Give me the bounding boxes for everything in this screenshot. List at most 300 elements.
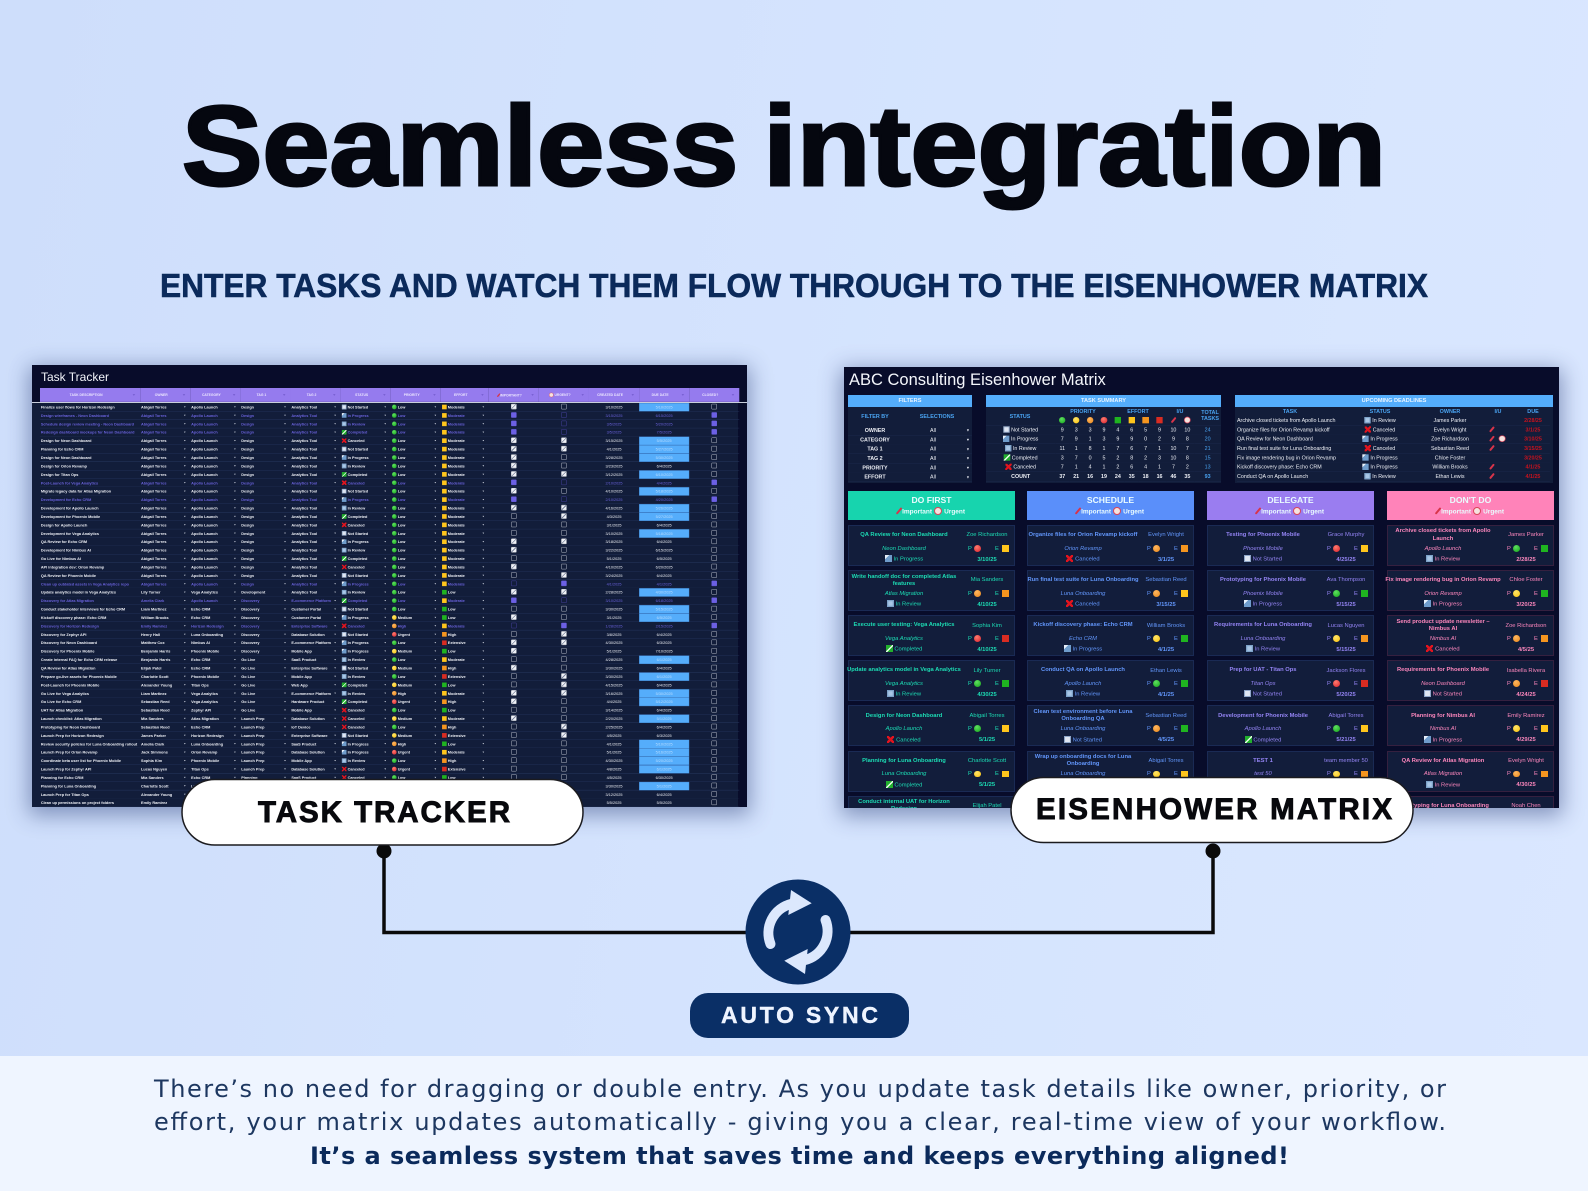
task cards: do first: P: [968, 546, 972, 552]
tracker task rows: Low: [398, 574, 405, 578]
tracker task rows: QA Review for Phoenix Mobile: [41, 574, 96, 578]
task summary block: 1: [1158, 446, 1161, 451]
tracker task rows: Clean up permissions on project folders: [41, 801, 114, 805]
tracker task rows: Low: [448, 616, 455, 620]
tracker task rows: Database Solution: [291, 633, 325, 637]
tracker task rows: 6/30/2025: [656, 776, 673, 780]
task summary block: 93: [1205, 474, 1211, 479]
tracker column headers: CATEGORY: [202, 393, 221, 397]
upcoming deadlines block: In Progress: [1370, 437, 1398, 442]
tracker task rows: Nimbus AI: [191, 641, 210, 645]
tracker task rows: In Progress: [348, 456, 369, 460]
upcoming deadlines block: In Review: [1372, 418, 1396, 424]
task cards: delegate: In Progress: [1253, 602, 1282, 608]
task cards: delegate: 5/21/25: [1336, 737, 1356, 743]
tracker task rows: Discovery: [241, 649, 260, 654]
tracker task rows: Luna Onboarding: [191, 742, 223, 746]
task cards: delegate: E: [1354, 591, 1358, 597]
tracker task rows: 5/5/2025: [657, 801, 672, 805]
task summary block: PRIORITY: [1070, 409, 1096, 415]
tracker task rows: Vega Analytics: [191, 590, 218, 595]
quadrant header: delegate: DELEGATE: [1267, 494, 1314, 504]
tracker task rows: Development: [241, 590, 265, 595]
tracker task rows: Moderate: [448, 489, 465, 494]
task summary block: I/U: [1177, 409, 1183, 415]
label pill: auto sync: AUTO SYNC: [721, 1002, 878, 1028]
tracker task rows: 6/1/2025: [657, 767, 672, 771]
quadrant header: schedule: Important Urgent: [1081, 508, 1144, 515]
task cards: do first: Update analytics model in Vega Analytics: [847, 667, 961, 673]
tracker task rows: Clean up outdated assets in Vega Analytics repo: [41, 582, 129, 586]
tracker task rows: 6/5/2025: [657, 616, 672, 620]
tracker task rows: Apollo Launch: [191, 565, 218, 569]
tracker task rows: Design: [241, 515, 254, 519]
task summary block: Canceled: [1013, 464, 1036, 470]
task cards: delegate: P: [1327, 546, 1331, 552]
filters block: ▼: [966, 447, 970, 451]
tracker task rows: Atlas Migration: [191, 717, 219, 721]
tracker task rows: Apollo Launch: [191, 498, 218, 502]
tracker task rows: SaaS Product: [291, 784, 316, 788]
tracker task rows: Design: [241, 506, 254, 510]
tracker task rows: Discovery: [241, 633, 260, 637]
tracker task rows: Phoenix Mobile: [191, 759, 219, 763]
tracker task rows: Launch Prep for Orion Revamp: [41, 750, 97, 755]
tracker task rows: 6/1/2025: [657, 675, 672, 679]
task cards: delegate: 5/15/25: [1336, 647, 1356, 653]
task cards: don't do: P: [1507, 726, 1511, 732]
tracker task rows: Moderate: [448, 473, 465, 477]
tracker task rows: 4/30/2025: [656, 590, 673, 595]
task summary block: 21: [1205, 446, 1211, 451]
upcoming deadlines block: William Brooks: [1432, 465, 1468, 470]
tracker task rows: Development for Nimbus AI: [41, 548, 91, 553]
tracker task rows: In Progress: [348, 641, 369, 645]
task cards: don't do: Neon Dashboard: [1421, 681, 1465, 687]
tracker task rows: Matthew Cox: [141, 641, 165, 645]
task cards: don't do: E: [1534, 726, 1538, 732]
tracker task rows: 2/15/2025: [656, 624, 673, 628]
tracker task rows: QA Review for Atlas Migration: [41, 666, 95, 670]
task cards: do first: Conduct internal UAT for Horizon: [858, 799, 950, 805]
tracker task rows: Low: [448, 742, 455, 746]
tracker task rows: Development for Phoenix Mobile: [41, 515, 100, 519]
task cards: do first: Charlotte Scott: [968, 758, 1006, 764]
task cards: do first: P: [968, 636, 972, 642]
task cards: do first: In Progress: [894, 557, 923, 563]
tracker task rows: Prototyping for Neon Dashboard: [41, 725, 100, 729]
tracker task rows: 5/10/2025: [656, 742, 673, 746]
tracker task rows: Low: [398, 506, 405, 510]
task summary block: 37: [1059, 474, 1065, 479]
tracker task rows: Low: [398, 658, 405, 662]
tracker task rows: Low: [398, 582, 405, 586]
task cards: delegate: [1207, 525, 1374, 777]
tracker task rows: Phoenix Mobile: [191, 649, 219, 654]
filters block: All: [930, 446, 936, 452]
tracker task rows: Design: [241, 430, 254, 435]
tracker task rows: Development for Vega Analytics: [41, 531, 99, 536]
tracker task rows: Launch Prep: [241, 734, 264, 738]
task cards: do first: Apollo Launch: [886, 726, 922, 732]
tracker task rows: Post-Launch for Phoenix Mobile: [41, 683, 99, 687]
tracker task rows: Go Live for Echo CRM: [41, 700, 81, 704]
tracker task rows: Design for Apollo Launch: [41, 523, 87, 527]
tracker task rows: Low: [398, 708, 405, 713]
tracker task rows: Completed: [348, 599, 367, 603]
filters block: All: [930, 465, 936, 471]
tracker task rows: Go Live: [241, 666, 255, 670]
tracker task rows: Analytics Tool: [291, 590, 317, 595]
tracker task rows: Low: [398, 641, 405, 645]
upcoming deadlines block: STATUS: [1370, 409, 1390, 415]
tracker task rows: Abigail Torres: [141, 515, 166, 519]
task summary block: 1: [1158, 464, 1161, 470]
tracker task rows: Moderate: [448, 691, 465, 696]
tracker task rows: Go Live: [241, 708, 255, 713]
footer description text: effort, your matrix updates automatically - giving you a clear, real-time view of your workflow.: [154, 1108, 1446, 1136]
task summary block: 1: [1075, 464, 1078, 470]
task cards: schedule: Wrap up onboarding docs for Luna: [1035, 754, 1131, 760]
task cards: schedule: 4/1/25: [1158, 647, 1174, 653]
tracker task rows: Analytics Tool: [291, 506, 317, 510]
filters block: All: [930, 474, 936, 480]
tracker task rows: 4/1/2025: [607, 742, 621, 746]
task cards: don't do: P: [1507, 771, 1511, 777]
tracker task rows: Low: [398, 489, 405, 494]
tracker task rows: Analytics Tool: [291, 498, 317, 502]
tracker task rows: In Progress: [348, 540, 369, 544]
task summary block: 11: [1060, 446, 1065, 451]
task cards: schedule: Abigail Torres: [1148, 758, 1184, 764]
tracker task rows: Design for Orion Revamp: [41, 464, 87, 468]
task summary block: 5: [1102, 455, 1105, 461]
task cards: schedule: Luna Onboarding: [1061, 771, 1105, 777]
tracker task rows: Abigail Torres: [141, 405, 166, 409]
tracker task rows: In Review: [348, 691, 365, 696]
task cards: schedule: Orion Revamp: [1064, 546, 1102, 552]
filters block: All: [930, 428, 936, 433]
tracker task rows: Moderate: [448, 515, 465, 519]
tracker task rows: IoT Device: [291, 725, 310, 729]
task cards: schedule: Onboarding: [1067, 761, 1099, 767]
task cards: do first: P: [968, 591, 972, 597]
filters block: ▼: [966, 457, 970, 461]
tracker task rows: Titan Ops: [191, 793, 209, 797]
tracker task rows: Low: [398, 456, 405, 460]
task cards: delegate: P: [1327, 681, 1331, 687]
filters block: TAG 2: [867, 456, 883, 461]
task cards: delegate: Development for Phoenix Mobile: [1218, 713, 1308, 719]
tracker task rows: API integration dev: Orion Revamp: [41, 565, 104, 569]
tracker task rows: 6/15/2025: [656, 414, 673, 418]
tracker task rows: 3/28/2025: [606, 456, 623, 460]
tracker task rows: Moderate: [448, 540, 465, 544]
tracker task rows: Enterprise Software: [291, 734, 328, 738]
tracker task rows: SaaS Product: [291, 742, 316, 746]
task cards: schedule: Conduct QA on Apollo Launch: [1041, 667, 1125, 673]
tracker task rows: High: [448, 793, 456, 797]
tracker task rows: Finalize user flows for Horizon Redesign: [41, 405, 115, 409]
tracker task rows: Customer Portal: [291, 607, 321, 611]
task cards: schedule: Luna Onboarding: [1061, 591, 1105, 597]
task cards: do first: Completed: [894, 647, 922, 653]
task summary block: 46: [1170, 474, 1176, 479]
tracker task rows: 3/15/2025: [606, 439, 623, 443]
tracker task rows: Completed: [348, 515, 367, 519]
task cards: don't do: Launch: [1433, 536, 1453, 542]
tracker task rows: Launch Prep for Horizon Redesign: [41, 734, 104, 738]
task cards: schedule: Kickoff discovery phase: Echo CRM: [1033, 622, 1133, 628]
upcoming deadlines block: 3/20/25: [1524, 455, 1542, 461]
task cards: do first: QA Review for Neon Dashboard: [860, 532, 948, 538]
filters block: ▼: [966, 475, 970, 479]
tracker task rows: 5/30/2025: [656, 691, 673, 696]
task cards: don't do: Nimbus AI: [1430, 726, 1456, 732]
tracker task rows: Canceled: [348, 767, 365, 771]
task cards: don't do: P: [1507, 681, 1511, 687]
tracker task rows: 4/30/2025: [606, 641, 623, 645]
task cards: schedule: Ethan Lewis: [1150, 668, 1182, 674]
tracker task rows: Medium: [398, 649, 412, 654]
tracker task rows: Moderate: [448, 784, 465, 788]
tracker task rows: 5/1/2025: [657, 717, 672, 721]
tracker task rows: Completed: [348, 557, 367, 561]
tracker task rows: Apollo Launch: [191, 574, 218, 578]
upcoming deadlines block: 4/1/25: [1526, 474, 1540, 480]
tracker task rows: Design: [241, 405, 254, 409]
tracker task rows: Design: [241, 582, 254, 586]
tracker task rows: 3/14/2025: [606, 708, 623, 713]
task cards: schedule: 3/15/25: [1156, 602, 1176, 608]
task cards: don't do: Evelyn Wright: [1508, 758, 1544, 764]
quadrant header: don't do: Important Urgent: [1441, 508, 1504, 515]
task cards: schedule: Echo CRM: [1069, 636, 1097, 642]
tracker task rows: Urgent: [398, 750, 410, 755]
tracker task rows: Launch Prep: [241, 793, 264, 797]
task cards: schedule: Onboarding QA: [1061, 716, 1105, 722]
tracker column headers: PRIORITY: [404, 393, 420, 397]
task cards: do first: Execute user testing: Vega Analytics: [854, 622, 954, 628]
tracker task rows: Analytics Tool: [291, 489, 317, 494]
quadrant header: do first: DO FIRST: [911, 494, 952, 504]
tracker task rows: 3/10/2025: [606, 405, 623, 409]
tracker task rows: Discovery for Neon Dashboard: [41, 641, 97, 645]
quadrant header: schedule: [1027, 491, 1194, 520]
tracker task rows: Apollo Launch: [191, 557, 218, 561]
task cards: don't do: Not Started: [1433, 692, 1462, 698]
tracker column headers: CREATED DATE: [597, 393, 623, 397]
task summary block: 4: [1089, 464, 1092, 470]
tracker task rows: Go Live for Vega Analytics: [41, 691, 89, 696]
task cards: do first: E: [995, 771, 999, 777]
task cards: don't do: Canceled: [1435, 647, 1460, 653]
tracker task rows: Phoenix Mobile: [191, 675, 219, 679]
tracker task rows: 3/8/2025: [607, 633, 621, 637]
task summary block: 8: [1130, 455, 1133, 461]
tracker task rows: UAT for Atlas Migration: [41, 708, 83, 713]
tracker task rows: 6/15/2025: [656, 548, 673, 553]
task cards: don't do: 3/20/25: [1516, 602, 1536, 608]
tracker task rows: Benjamin Harris: [141, 658, 170, 662]
task summary block: TASK SUMMARY: [1081, 398, 1126, 404]
tracker task rows: 4/1/2025: [657, 582, 672, 586]
tracker task rows: Canceled: [348, 523, 365, 527]
tracker task rows: Apollo Launch: [191, 473, 218, 477]
task summary block: EFFORT: [1127, 409, 1149, 415]
task summary block: 9: [1116, 436, 1119, 442]
task cards: schedule: Sebastian Reed: [1145, 713, 1187, 719]
task summary block: 3: [1075, 427, 1078, 433]
task cards: schedule: In Review: [1075, 692, 1100, 698]
tracker task rows: Medium: [398, 717, 412, 721]
filters block: FILTER BY: [861, 414, 889, 420]
tracker task rows: 6/5/2025: [657, 557, 672, 561]
task summary block: 3: [1089, 427, 1092, 433]
footer description text: [153, 1075, 1446, 1170]
tracker task rows: Discovery: [241, 599, 260, 603]
filters block: [848, 395, 972, 483]
tracker task rows: Analytics Tool: [291, 515, 317, 519]
tracker task rows: 7/5/2025: [657, 430, 672, 435]
tracker task rows: Not Started: [348, 734, 368, 738]
upcoming deadlines block: In Review: [1372, 474, 1396, 480]
tracker task rows: 3/1/2025: [607, 616, 621, 620]
quadrant header: delegate: Important Urgent: [1261, 508, 1324, 515]
tracker task rows: Vega Analytics: [191, 700, 218, 704]
tracker task rows: Low: [398, 531, 405, 536]
tracker task rows: 5/27/2025: [656, 515, 673, 519]
tracker task rows: In Progress: [348, 793, 369, 797]
tracker column headers: IMPORTANT?: [500, 393, 522, 397]
task summary block: 4: [1144, 464, 1147, 470]
tracker task rows: Not Started: [348, 405, 368, 409]
task cards: schedule: Evelyn Wright: [1148, 532, 1184, 538]
tracker task rows: Low: [398, 590, 405, 595]
label pill: eisenhower matrix: [1011, 778, 1413, 842]
tracker task rows: Elijah Patel: [141, 666, 161, 670]
footer description text: There’s no need for dragging or double entry. As you update task details like owner, priority, or: [153, 1075, 1446, 1103]
task cards: delegate: P: [1327, 636, 1331, 642]
tracker task rows: Analytics Tool: [291, 447, 317, 452]
filters block: EFFORT: [864, 474, 886, 480]
tracker task rows: 6/4/2025: [657, 574, 672, 578]
tracker task rows: 6/18/2025: [656, 599, 673, 603]
upcoming deadlines block: Chloe Foster: [1435, 455, 1465, 461]
task summary block: 8: [1089, 446, 1092, 451]
tracker task rows: Design: [241, 439, 254, 443]
tracker task rows: James Parker: [141, 734, 166, 738]
tracker task rows: Review security policies for Luna Onboarding rollout: [41, 742, 137, 746]
tracker column headers: EFFORT: [454, 393, 468, 397]
tracker task rows: Amelia Clark: [141, 742, 164, 746]
task cards: do first: 3/10/25: [977, 557, 997, 563]
task summary block: TASKS: [1201, 416, 1219, 422]
quadrant header: don't do: [1387, 491, 1554, 520]
tracker task rows: Horizon Redesign: [191, 624, 224, 628]
task summary block: 4: [1116, 427, 1119, 433]
task summary block: 9: [1061, 427, 1064, 433]
task cards: delegate: TEST 1: [1253, 758, 1273, 764]
tracker task rows: 2/28/2025: [606, 590, 623, 595]
tracker task rows: In Progress: [348, 582, 369, 586]
tracker task rows: Titan Ops: [191, 801, 209, 805]
tracker task rows: Medium: [398, 683, 412, 687]
tracker task rows: Emily Ramirez: [141, 801, 167, 805]
tracker task rows: 6/4/2025: [657, 725, 672, 729]
tracker task rows: Canceled: [348, 708, 365, 713]
tracker task rows: Abigail Torres: [141, 489, 166, 494]
tracker task rows: 3/24/2025: [606, 574, 623, 578]
tracker task rows: Charlotte Scott: [141, 675, 168, 679]
tracker task rows: Titan Ops: [191, 767, 209, 771]
task cards: delegate: Not Started: [1253, 692, 1282, 698]
tracker task rows: 3/1/2025: [607, 523, 621, 527]
tracker task rows: In Review: [348, 675, 365, 679]
tracker task rows: In Progress: [348, 750, 369, 755]
task summary block: 1: [1089, 436, 1092, 442]
task cards: do first: Write handoff doc for completed Atlas: [852, 574, 956, 580]
tracker task rows: Completed: [348, 683, 367, 687]
tracker task rows: Canceled: [348, 725, 365, 729]
tracker task rows: Canceled: [348, 481, 365, 485]
task cards: schedule: William Brooks: [1147, 623, 1185, 629]
tracker task rows: Low: [398, 557, 405, 561]
task cards: don't do: E: [1534, 636, 1538, 642]
task cards: do first: In Review: [896, 602, 921, 608]
task summary block: 21: [1073, 474, 1079, 479]
tracker task rows: Abigail Torres: [141, 456, 166, 460]
tracker task rows: Lily Turner: [141, 590, 161, 595]
task cards: schedule: E: [1174, 726, 1178, 732]
tracker task rows: Coordinate beta user list for Phoenix Mobile: [41, 759, 121, 763]
tracker task rows: Low: [398, 607, 405, 611]
tracker task rows: In Progress: [348, 414, 369, 418]
tracker task rows: Apollo Launch: [191, 414, 218, 418]
tracker task rows: Design for Neon Dashboard: [41, 456, 91, 460]
tracker task rows: 5/20/2025: [656, 422, 673, 426]
tracker task rows: 2/20/2025: [606, 717, 623, 721]
tracker task rows: 5/16/2025: [656, 750, 673, 755]
tracker task rows: Low: [448, 776, 455, 780]
tracker task rows: Sophia Kim: [141, 759, 162, 763]
tracker task rows: Low: [448, 683, 455, 687]
tracker task rows: Schedule design review meeting - Neon Dashboard: [41, 422, 134, 426]
task cards: delegate: Grace Murphy: [1328, 532, 1364, 538]
tracker task rows: Low: [398, 675, 405, 679]
icon: auto sync arrows: [746, 880, 850, 984]
tracker task rows: Moderate: [448, 456, 465, 460]
tracker task rows: 4/5/2025: [607, 734, 621, 738]
task cards: delegate: Requirements for Luna Onboarding: [1214, 622, 1312, 628]
tracker task rows: Canceled: [348, 439, 365, 443]
task cards: don't do: James Parker: [1508, 532, 1544, 538]
tracker task rows: Design: [241, 565, 254, 569]
tracker task rows: Not Started: [348, 489, 368, 494]
task summary block: 2: [1144, 455, 1147, 461]
task summary block: [986, 395, 1221, 483]
tracker task rows: High: [398, 742, 406, 746]
quadrant header: schedule: SCHEDULE: [1087, 494, 1134, 504]
panel title: ABC Consulting Eisenhower Matrix: ABC Consulting Eisenhower Matrix: [849, 370, 1106, 388]
tracker task rows: Analytics Tool: [291, 430, 317, 435]
tracker task rows: Apollo Launch: [191, 456, 218, 460]
task summary block: 2: [1158, 436, 1161, 442]
upcoming deadlines block: Fix image rendering bug in Orion Revamp: [1237, 455, 1336, 461]
tracker task rows: Echo CRM: [191, 776, 210, 780]
tracker task rows: Benjamin Harris: [141, 649, 170, 654]
upcoming deadlines block: Evelyn Wright: [1434, 427, 1466, 433]
